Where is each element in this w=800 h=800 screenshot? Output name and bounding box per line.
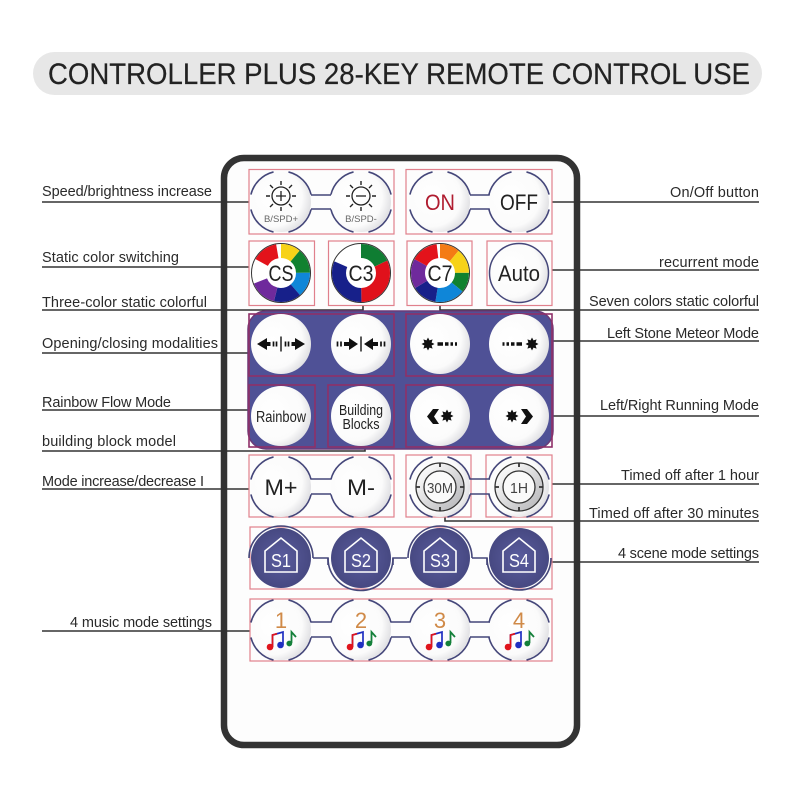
label: 4 music mode settings: 4 music mode settings <box>70 615 212 631</box>
button: opening arrows <box>251 314 311 374</box>
button: Rainbow <box>251 386 311 446</box>
row 6: scene buttons <box>249 526 552 590</box>
button: S2 <box>328 528 393 590</box>
purple mode panel <box>248 311 553 449</box>
label: left/right running mode: Left/Right Running Mode <box>600 398 759 414</box>
label: seven colors static colorful <box>440 294 759 310</box>
label: recurrent mode: recurrent mode <box>659 255 759 271</box>
label: static color switching: Static color switching <box>42 250 179 266</box>
left callouts <box>42 184 365 631</box>
button: S3 <box>408 526 472 588</box>
button: meteor right <box>489 314 549 374</box>
label: opening/closing modalities: Opening/closing modalities <box>42 336 218 352</box>
button: Auto <box>490 244 548 302</box>
button: ON <box>409 171 471 233</box>
label: left stone meteor mode: Left Stone Meteor Mode <box>607 326 759 342</box>
button: C7 color wheel: C7 <box>428 261 452 286</box>
label: timed off after 1 hour: Timed off after 1 hour <box>621 468 759 484</box>
button: S3: S3 <box>430 551 450 571</box>
label: speed/brightness increase: Speed/brightness increase <box>42 184 212 200</box>
label: building block model <box>42 434 365 451</box>
label: 4 scene mode settings: 4 scene mode settings <box>618 546 759 562</box>
button: OFF: OFF <box>500 190 538 215</box>
button: Building Blocks: Blocks <box>342 416 380 433</box>
button: music 3 <box>409 599 471 661</box>
label: three-color static colorful <box>42 295 363 311</box>
label: three-color static colorful: Three-color static colorful <box>42 295 207 311</box>
right callouts <box>440 185 759 562</box>
button: OFF <box>488 171 550 233</box>
button: B/SPD+: B/SPD+ <box>264 214 298 225</box>
button: C7 color wheel <box>410 244 470 302</box>
button: B/SPD-: B/SPD- <box>345 214 377 225</box>
button: M+ <box>250 456 312 518</box>
button: S4: S4 <box>509 551 529 571</box>
button: 1H timer <box>488 456 550 518</box>
button: Auto: Auto <box>498 261 540 286</box>
button: music 2: 2 <box>355 608 367 633</box>
button: music 3: 3 <box>434 608 446 633</box>
row 7: music buttons <box>250 599 552 661</box>
button: C3 color wheel <box>332 244 390 302</box>
button: run right <box>489 386 549 446</box>
label: rainbow flow mode: Rainbow Flow Mode <box>42 395 171 411</box>
button: closing arrows <box>331 314 391 374</box>
label: on/off button: On/Off button <box>670 185 759 201</box>
button: Rainbow: Rainbow <box>256 409 307 426</box>
button: music 1 <box>250 599 312 661</box>
button: M-: M- <box>347 475 375 500</box>
button: 30M timer <box>409 456 471 518</box>
button: M- <box>330 456 392 518</box>
label: mode increase/decrease: Mode increase/decrease I <box>42 474 204 490</box>
button: CS color wheel: CS <box>268 261 294 286</box>
button: music 4 <box>488 599 550 661</box>
label: seven colors static colorful: Seven colors static colorful <box>589 294 759 310</box>
button: CS color wheel <box>252 244 310 302</box>
label: timed off after 30 minutes: Timed off after 30 minutes <box>589 506 759 522</box>
button: C3 color wheel: C3 <box>348 261 374 286</box>
button: ON: ON <box>425 190 455 215</box>
button: B/SPD- <box>330 171 392 233</box>
row 5: mode and timers <box>249 455 552 518</box>
button: S2: S2 <box>351 551 371 571</box>
button: M+: M+ <box>264 475 298 500</box>
button: meteor left <box>410 314 470 374</box>
button: S1: S1 <box>271 551 291 571</box>
button: music 1: 1 <box>275 608 287 633</box>
button: music 2 <box>330 599 392 661</box>
button: 30M timer: 30M <box>427 480 453 497</box>
button: Building Blocks: Building <box>339 402 383 419</box>
remote control body <box>224 158 577 745</box>
title: CONTROLLER PLUS 28-KEY REMOTE CONTROL USE <box>48 58 750 91</box>
button: run left <box>410 386 470 446</box>
row 2: color wheels and auto <box>249 241 552 306</box>
button: S1 <box>249 526 313 588</box>
label: timed off after 30 minutes <box>445 506 759 522</box>
button: S4 <box>487 528 551 590</box>
row 1: brightness and power <box>249 170 552 234</box>
button: 1H timer: 1H <box>510 480 528 497</box>
button: Building Blocks <box>331 386 391 446</box>
button: music 4: 4 <box>513 608 525 633</box>
button: B/SPD+ <box>250 171 312 233</box>
label: building block model: building block model <box>42 434 176 450</box>
